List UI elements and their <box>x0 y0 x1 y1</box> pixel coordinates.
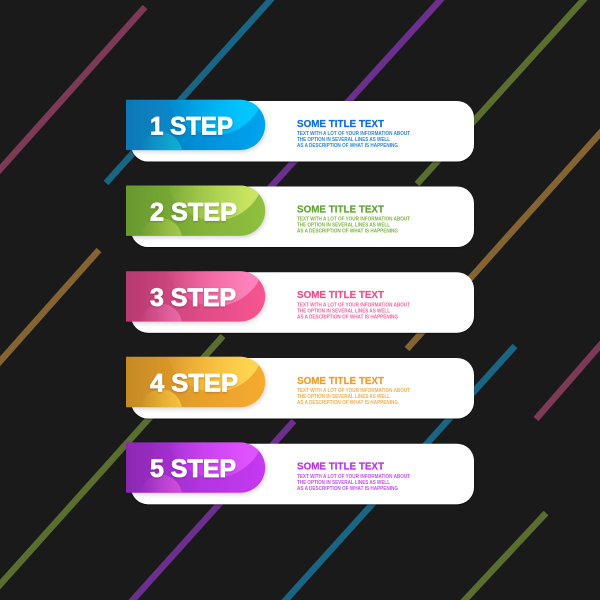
step 2 text block: AS A DESCRIPTION OF WHAT IS HAPPENING <box>297 229 398 235</box>
step 4 text block: AS A DESCRIPTION OF WHAT IS HAPPENING <box>297 400 398 406</box>
step 5 tab <box>126 442 268 496</box>
step 2 white card <box>131 186 474 247</box>
step 3 tab: 3 STEP <box>150 284 236 312</box>
step 1 text block: TEXT WITH A LOT OF YOUR INFORMATION ABOUT <box>297 131 411 137</box>
step 4 text block <box>297 375 411 406</box>
step 5 text block: THE OPTION IN SEVERAL LINES AS WELL <box>297 480 391 486</box>
step 5 tab: 5 STEP <box>150 455 236 483</box>
step 4 text block: SOME TITLE TEXT <box>297 375 385 387</box>
step 3 text block <box>297 289 411 320</box>
step 2 panel <box>126 186 474 248</box>
step 3 tab <box>126 271 268 325</box>
step 3 text block: THE OPTION IN SEVERAL LINES AS WELL <box>297 308 391 314</box>
step 1 tab <box>126 100 268 154</box>
step 4 white card <box>131 358 474 418</box>
step 4 panel <box>126 356 474 420</box>
step 5 text block: SOME TITLE TEXT <box>297 461 385 473</box>
step 2 tab: 2 STEP <box>150 198 237 226</box>
step 5 panel <box>126 442 474 506</box>
step 4 tab <box>126 356 268 411</box>
step 3 text block: SOME TITLE TEXT <box>297 289 385 301</box>
step 3 text block: AS A DESCRIPTION OF WHAT IS HAPPENING <box>297 314 398 320</box>
step 4 text block: TEXT WITH A LOT OF YOUR INFORMATION ABOUT <box>297 388 411 394</box>
step 3 panel <box>126 271 474 334</box>
step 2 tab <box>126 186 268 240</box>
step 3 text block: TEXT WITH A LOT OF YOUR INFORMATION ABOUT <box>297 302 411 308</box>
step 5 white card <box>131 444 474 504</box>
step 1 text block: THE OPTION IN SEVERAL LINES AS WELL <box>297 137 391 143</box>
step 5 text block <box>297 461 411 492</box>
step 2 text block: THE OPTION IN SEVERAL LINES AS WELL <box>297 223 391 229</box>
step 2 text block: TEXT WITH A LOT OF YOUR INFORMATION ABOUT <box>297 217 411 223</box>
step 1 white card <box>131 101 474 162</box>
step 5 text block: AS A DESCRIPTION OF WHAT IS HAPPENING <box>297 486 398 492</box>
step 4 tab: 4 STEP <box>150 370 238 398</box>
step 5 text block: TEXT WITH A LOT OF YOUR INFORMATION ABOUT <box>297 474 411 480</box>
step 4 text block: THE OPTION IN SEVERAL LINES AS WELL <box>297 394 391 400</box>
step 2 text block <box>297 204 411 235</box>
step 2 text block: SOME TITLE TEXT <box>297 204 385 216</box>
step 1 panel <box>126 100 474 163</box>
step 3 white card <box>131 272 474 333</box>
step 1 text block: AS A DESCRIPTION OF WHAT IS HAPPENING <box>297 143 398 149</box>
step 1 text block <box>297 118 411 149</box>
step 1 text block: SOME TITLE TEXT <box>297 118 385 130</box>
step 1 tab: 1 STEP <box>150 112 233 140</box>
